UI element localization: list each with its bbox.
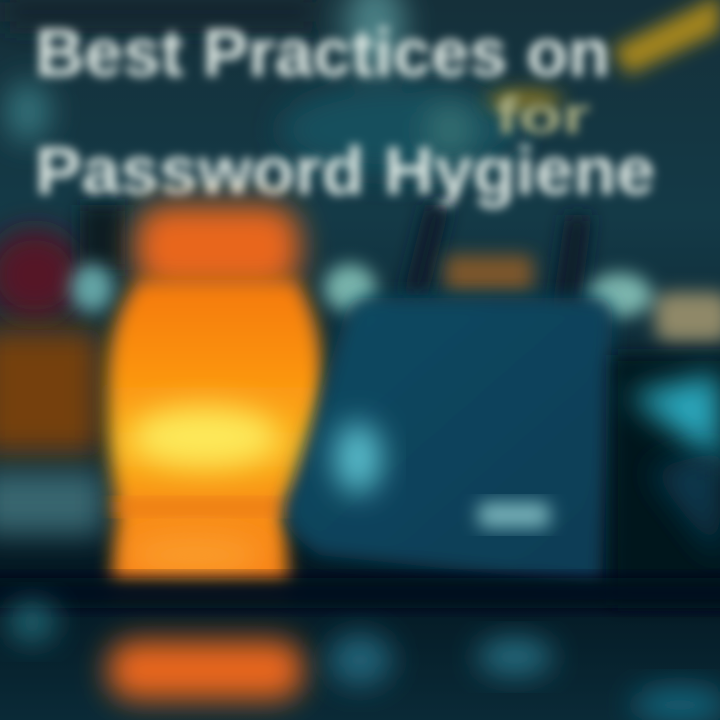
title: Best Practices on: [35, 15, 610, 91]
glowing orange jar: [107, 205, 322, 590]
title: Password Hygiene: [35, 133, 655, 209]
left red object and amber bottle: [0, 229, 105, 535]
jar glow: [130, 407, 280, 467]
router wifi mark: [334, 422, 382, 494]
right dark device: [612, 355, 720, 605]
jar lid: [135, 205, 300, 290]
router label: [478, 502, 550, 528]
jar bands: [115, 500, 290, 514]
small objects behind: [71, 255, 720, 342]
reflections: [8, 602, 720, 720]
title: [35, 15, 655, 209]
title: for: [495, 87, 590, 145]
jar body: [107, 280, 322, 590]
table edge: [0, 578, 720, 608]
background glows: [0, 0, 520, 175]
router body: [284, 298, 612, 585]
gold pen stroke: [487, 0, 720, 111]
router antennas: [80, 205, 592, 310]
